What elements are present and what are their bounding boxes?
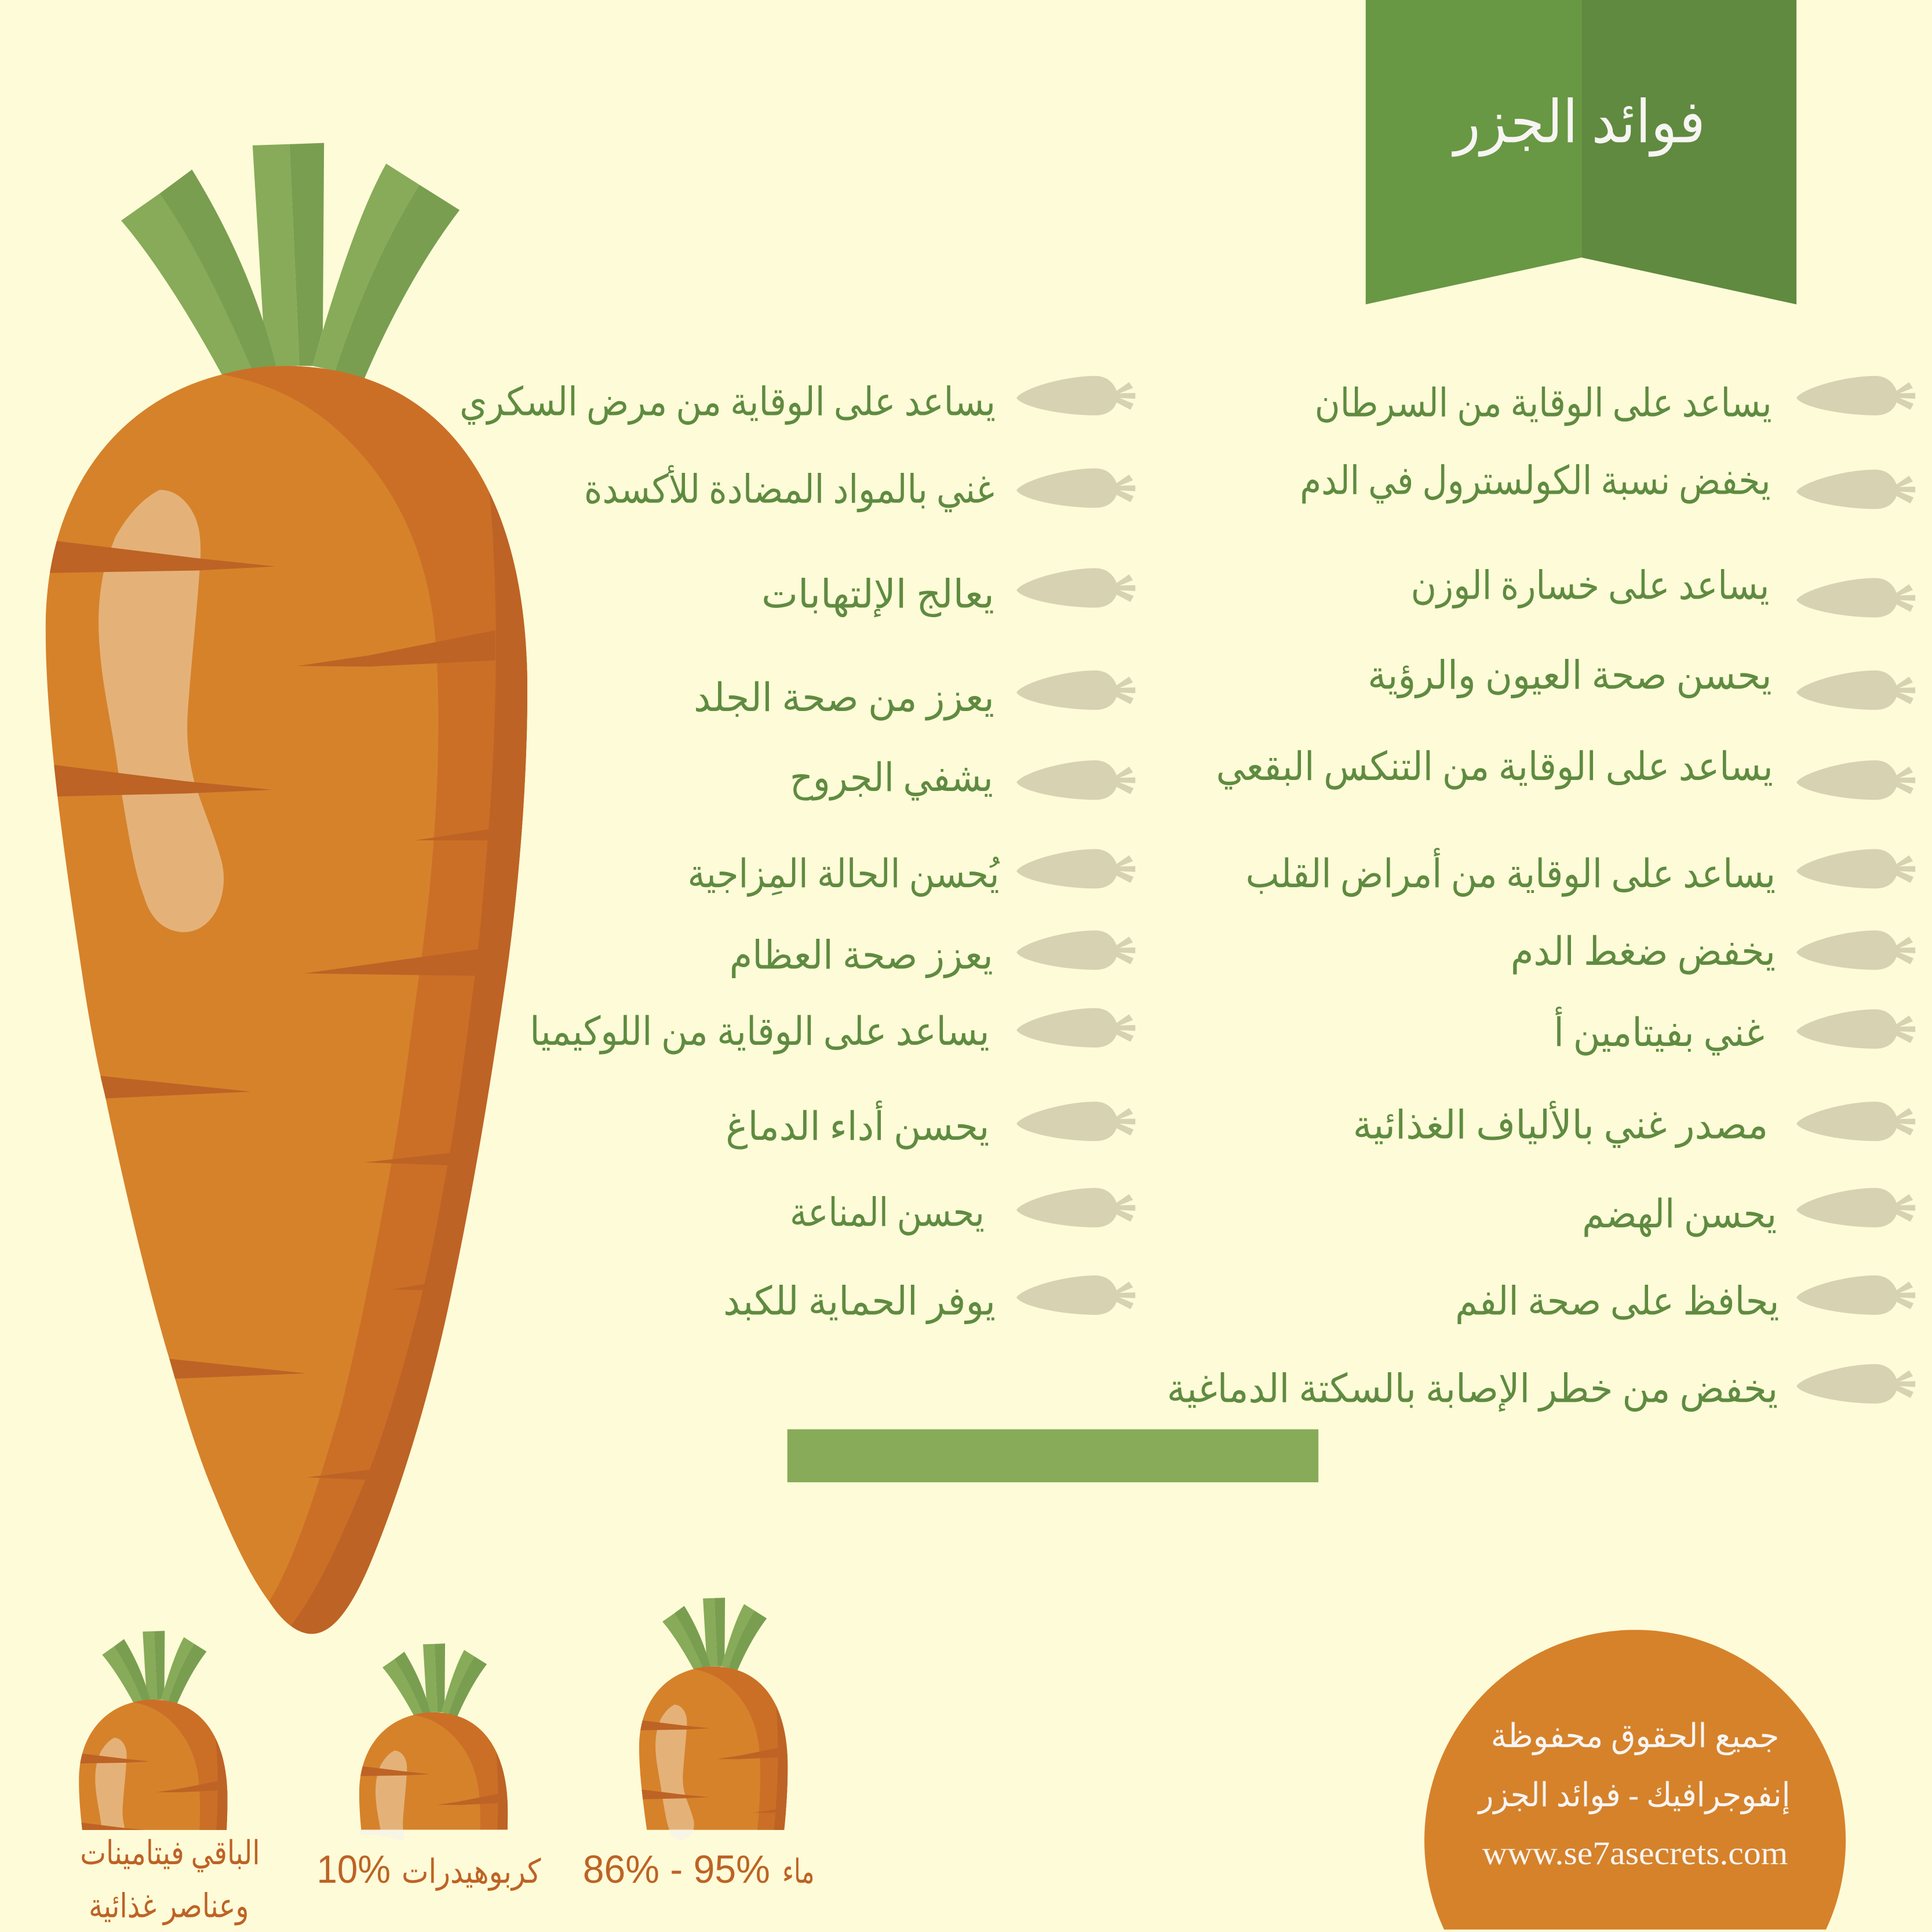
benefit row bbox=[1216, 745, 1915, 800]
benefits list: right column bbox=[1167, 376, 1915, 1412]
benefits list: left column bbox=[460, 376, 1135, 1325]
benefit row bbox=[790, 756, 1135, 801]
benefit row: يخفض من خطر الإصابة بالسكتة الدماغية bbox=[1167, 1367, 1778, 1412]
benefit row: مصدر غني بالألياف الغذائية bbox=[1353, 1101, 1768, 1149]
small carrot: carbohydrates bbox=[359, 1643, 508, 1840]
benefit row bbox=[1411, 563, 1915, 617]
title: فوائد الجزر bbox=[1451, 90, 1705, 157]
benefit row: يساعد على الوقاية من مرض السكري bbox=[460, 380, 996, 425]
benefit row bbox=[790, 1188, 1135, 1236]
benefit row: يُحسن الحالة المِزاجية bbox=[687, 852, 1000, 897]
benefit row bbox=[1455, 1275, 1915, 1325]
benefit row bbox=[1554, 1007, 1915, 1056]
banner bbox=[1366, 0, 1796, 304]
green bar bbox=[788, 1429, 1318, 1482]
benefit row bbox=[694, 670, 1135, 721]
benefit row bbox=[761, 568, 1135, 617]
benefit row: يخفض ضغط الدم bbox=[1511, 929, 1776, 975]
label: vitamins and nutrients: الباقي فيتامينات bbox=[80, 1835, 260, 1872]
small carrot: water bbox=[636, 1598, 792, 1842]
label: water: 86% - 95% bbox=[583, 1847, 770, 1891]
label: carbohydrates: كربوهيدرات bbox=[402, 1854, 541, 1891]
benefit row: يساعد على الوقاية من أمراض القلب bbox=[1246, 848, 1776, 897]
benefit row: يحسن المناعة bbox=[790, 1191, 985, 1236]
label: carbohydrates bbox=[316, 1847, 541, 1891]
benefit row: يوفر الحماية للكبد bbox=[723, 1280, 996, 1325]
main carrot illustration bbox=[37, 143, 542, 1657]
benefit row: يساعد على الوقاية من اللوكيميا bbox=[530, 1009, 989, 1055]
benefit row: يعزز صحة العظام bbox=[730, 933, 993, 978]
benefit row: يساعد على الوقاية من التنكس البقعي bbox=[1216, 745, 1773, 790]
benefit row: يساعد على خسارة الوزن bbox=[1411, 563, 1769, 608]
benefit row: غني بالمواد المضادة للأكسدة bbox=[584, 465, 994, 513]
benefit row: يعالج الإلتهابات bbox=[761, 572, 994, 617]
benefit row: غني بفيتامين أ bbox=[1554, 1007, 1765, 1056]
label: vitamins and nutrients bbox=[80, 1835, 260, 1926]
label: vitamins and nutrients: وعناصر غذائية bbox=[89, 1888, 249, 1926]
copyright text: جميع الحقوق محفوظة bbox=[1491, 1718, 1779, 1755]
benefit row bbox=[726, 1100, 1135, 1150]
benefit row bbox=[1582, 1188, 1915, 1237]
benefit row: يشفي الجروح bbox=[790, 756, 993, 801]
benefit row bbox=[730, 931, 1135, 978]
copyright badge bbox=[1424, 1630, 1846, 1930]
benefit row: يحسن الهضم bbox=[1582, 1192, 1777, 1237]
label: water: ماء bbox=[782, 1854, 814, 1890]
benefit row: يحسن صحة العيون والرؤية bbox=[1368, 654, 1772, 699]
label: carbohydrates: 10% bbox=[316, 1847, 391, 1891]
website: www.se7asecrets.com bbox=[1482, 1835, 1788, 1872]
benefit row: يحافظ على صحة الفم bbox=[1455, 1280, 1779, 1325]
benefit row: يحسن أداء الدماغ bbox=[726, 1100, 989, 1150]
small carrot: vitamins and minerals bbox=[79, 1631, 227, 1830]
benefit row: يعزز من صحة الجلد bbox=[694, 676, 994, 721]
benefit row bbox=[723, 1275, 1135, 1325]
benefit row: يخفض نسبة الكولسترول في الدم bbox=[1300, 459, 1770, 504]
infographic name: إنفوجرافيك - فوائد الجزر bbox=[1477, 1777, 1790, 1815]
benefit row: يساعد على الوقاية من السرطان bbox=[1315, 381, 1772, 427]
benefit row bbox=[1511, 929, 1915, 975]
benefit row bbox=[1368, 654, 1915, 710]
